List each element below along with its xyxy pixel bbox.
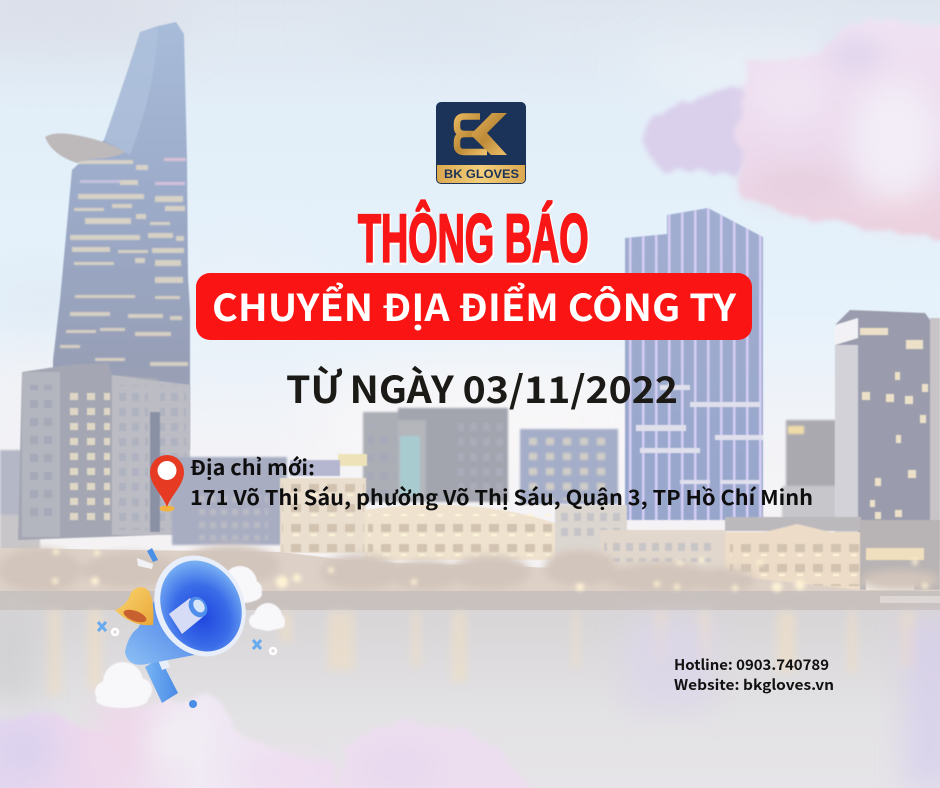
- sky background: [0, 0, 940, 620]
- contact info: [674, 654, 834, 695]
- building: right tower: [835, 310, 940, 560]
- handle: [145, 657, 178, 703]
- logo wordmark: BK GLOVES: [444, 167, 519, 181]
- building: blue block behind address: [172, 457, 287, 545]
- tower windows: [60, 158, 188, 442]
- sparkles: [98, 548, 276, 708]
- contact info: Website: bkgloves.vn: [674, 674, 834, 695]
- horn core: [169, 598, 204, 634]
- logo monogram K: [471, 113, 507, 155]
- building: Bitexco tower: [53, 22, 190, 450]
- building: blue glass block: [520, 429, 618, 504]
- icon: location pin: [150, 455, 184, 512]
- logo monogram B: [457, 116, 487, 152]
- icon: megaphone illustration: [95, 540, 285, 708]
- bell: [115, 587, 153, 625]
- small clouds: [95, 566, 285, 708]
- building: tower base: [18, 363, 190, 540]
- building: far left blocks: [0, 450, 40, 555]
- address block: [190, 451, 813, 511]
- building: grey mid-rise: [363, 408, 508, 502]
- river water: [0, 610, 940, 788]
- pink cloud bottom: [0, 693, 545, 788]
- date line: TỪ NGÀY 03/11/2022: [286, 360, 678, 414]
- title: THÔNG BÁO: [358, 200, 589, 276]
- horn body: [125, 600, 205, 665]
- horn mouth: [137, 540, 263, 672]
- building: back block right: [782, 420, 836, 520]
- red banner: CHUYỂN ĐỊA ĐIỂM CÔNG TY: [212, 278, 737, 332]
- building: purple tower: [625, 208, 763, 520]
- logo: BK Gloves: [436, 102, 526, 184]
- address block: 171 Võ Thị Sáu, phường Võ Thị Sáu, Quận 3, TP Hồ Chí Minh: [190, 481, 813, 511]
- cloud: purple lobe: [646, 85, 760, 178]
- cloud: pink body: [738, 18, 940, 240]
- contact info: Hotline: 0903.740789: [674, 654, 829, 675]
- buildings: waterfront hotels: [280, 454, 940, 590]
- title: THÔNG BÁO: [360, 202, 590, 278]
- city skyline: [0, 22, 940, 610]
- tree line and city lights: [0, 545, 940, 610]
- tower deck: [45, 133, 125, 163]
- address block: Địa chỉ mới:: [190, 451, 315, 481]
- pink cloud top right: [646, 18, 940, 240]
